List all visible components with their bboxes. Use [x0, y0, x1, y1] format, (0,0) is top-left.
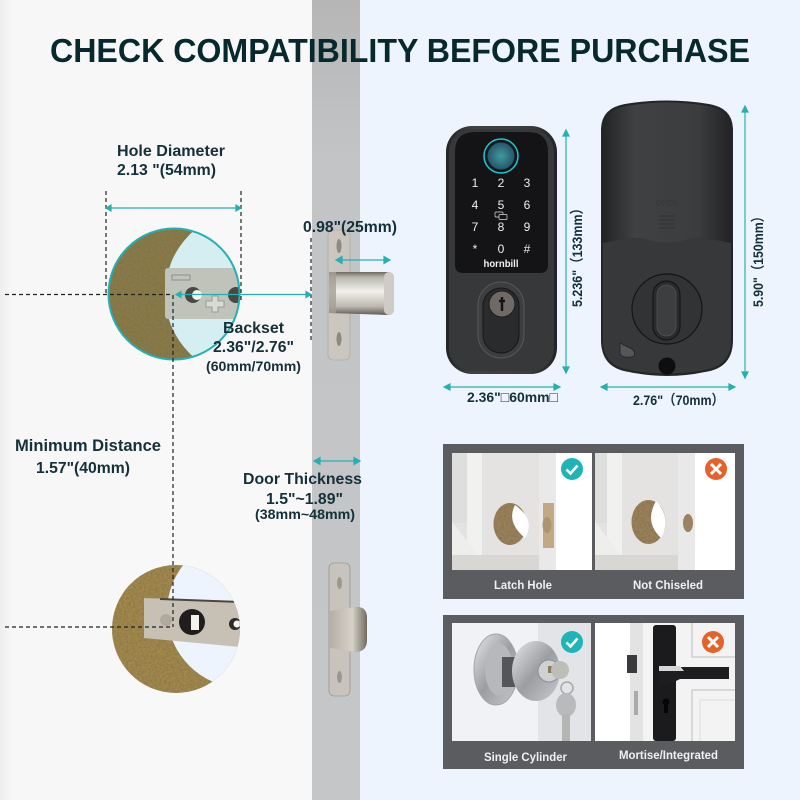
- label: backset: Backset: [223, 320, 285, 337]
- lock dimensions: 2.76"（70mm）: [633, 392, 724, 408]
- caption: latch hole: Latch Hole: [494, 580, 552, 592]
- label: backset: [206, 320, 301, 374]
- dashed guide lines: [5, 191, 311, 627]
- label: minimum distance: [15, 437, 161, 477]
- keypad digits: 8: [498, 220, 505, 234]
- keypad digits: 5: [498, 198, 505, 212]
- rear thumb-turn lock: [601, 100, 733, 376]
- icon: check: [561, 631, 583, 653]
- rear thumb-turn lock: OPEN: [656, 199, 679, 208]
- label: door thickness: [243, 471, 362, 522]
- fingerprint sensor: [484, 139, 518, 173]
- deadbolt side hardware: [328, 230, 394, 360]
- panel: latch preparation: [443, 444, 744, 599]
- caption: single cylinder: Single Cylinder: [484, 752, 568, 764]
- photo: mortise lock: [595, 622, 742, 745]
- bottom hole: [658, 358, 676, 374]
- label: hole diameter: 2.13 "(54mm): [117, 162, 216, 179]
- keypad digits: 1: [472, 176, 479, 190]
- battery tab: [620, 343, 635, 357]
- photo: latch hole: [452, 453, 592, 570]
- label: door thickness: 1.5"~1.89": [266, 491, 343, 508]
- label: door thickness: (38mm~48mm): [255, 506, 355, 522]
- label: bolt length: 0.98"(25mm): [303, 219, 397, 236]
- icon: cross: [702, 631, 724, 653]
- label: hole diameter: Hole Diameter: [117, 143, 225, 160]
- label: door thickness: Door Thickness: [243, 471, 362, 488]
- lock dimensions: 5.236"（133mm）: [569, 202, 585, 307]
- door face: [0, 0, 312, 800]
- label: minimum distance: 1.57"(40mm): [36, 460, 130, 477]
- label: backset: 2.36"/2.76": [213, 339, 294, 356]
- card icon: [495, 212, 507, 220]
- keypad digits: [472, 176, 531, 256]
- label: hole diameter: [117, 143, 225, 179]
- keyway: [478, 282, 524, 358]
- latch side hardware: [329, 563, 367, 696]
- keypad digits: *: [473, 242, 478, 256]
- title: CHECK COMPATIBILITY BEFORE PURCHASE: [50, 32, 750, 69]
- thumb turn: [632, 274, 702, 344]
- deadbolt hole: [108, 228, 240, 360]
- lock dimensions: [467, 202, 766, 408]
- label: minimum distance: Minimum Distance: [15, 437, 161, 455]
- photo: not chiseled: [595, 453, 735, 570]
- panel: lock type: [443, 615, 744, 769]
- front keypad lock: [446, 126, 557, 374]
- keypad digits: 7: [472, 220, 479, 234]
- photo: single cylinder: [452, 623, 591, 744]
- keypad digits: 2: [498, 176, 505, 190]
- keypad digits: 4: [472, 198, 479, 212]
- lock dimensions: 2.36"□60mm□: [467, 389, 559, 405]
- label: backset: (60mm/70mm): [206, 358, 301, 374]
- teal measurement arrows: [106, 106, 748, 464]
- brand: hornbill: [484, 259, 519, 270]
- keypad digits: 6: [524, 198, 531, 212]
- keypad digits: 3: [524, 176, 531, 190]
- icon: check: [561, 458, 583, 480]
- keypad digits: 0: [498, 242, 505, 256]
- caption: not chiseled: Not Chiseled: [633, 580, 703, 592]
- keypad digits: 9: [524, 220, 531, 234]
- icon: cross: [705, 458, 727, 480]
- lock dimensions: 5.90"（150mm）: [750, 210, 766, 307]
- door edge: [312, 0, 360, 800]
- caption: mortise/integrated: Mortise/Integrated: [619, 750, 718, 762]
- latch hole: [112, 565, 240, 693]
- keypad digits: #: [524, 242, 531, 256]
